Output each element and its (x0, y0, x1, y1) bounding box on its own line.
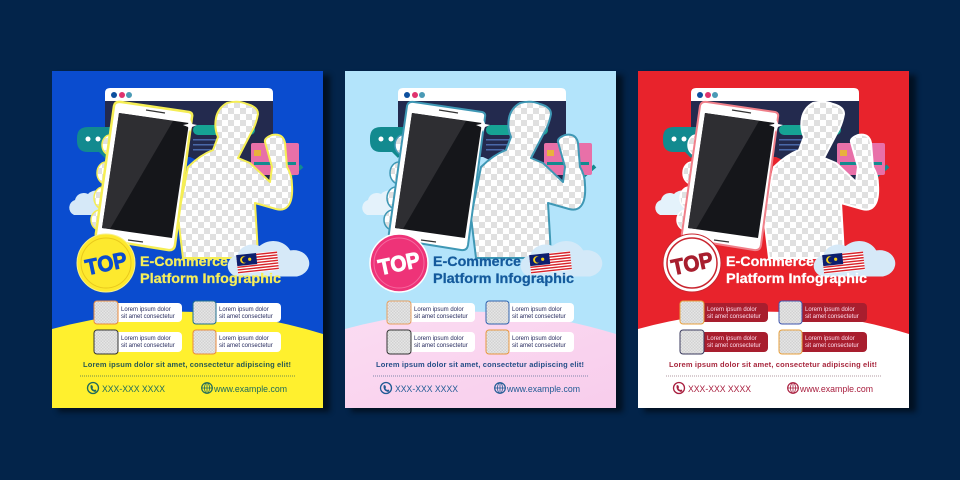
feature cards: Lorem ipsum dolor (805, 336, 855, 342)
bottom wave (345, 312, 616, 408)
contact phone: XXX-XXX XXXX (395, 384, 459, 395)
hand placeholder (384, 135, 411, 230)
feature cards: sit amet consectetur (219, 343, 273, 349)
cloud right (814, 241, 895, 276)
feature cards: sit amet consectetur (707, 314, 761, 320)
person placeholder (178, 102, 292, 258)
hand placeholder (677, 135, 704, 230)
icon: credit card (251, 143, 302, 178)
title (140, 253, 281, 286)
title: Platform Infographic (140, 270, 281, 286)
feature cards: sit amet consectetur (121, 314, 175, 320)
cloud left (69, 191, 117, 215)
title (726, 253, 867, 286)
tagline: Lorem ipsum dolor sit amet, consectetur adipiscing elit! (376, 360, 584, 369)
feature cards: sit amet consectetur (805, 314, 859, 320)
cloud left (655, 191, 703, 215)
phone (682, 102, 783, 250)
feature cards: Lorem ipsum dolor (121, 307, 171, 313)
bottom wave (52, 312, 323, 408)
feature cards: sit amet consectetur (512, 343, 566, 349)
browser window (691, 88, 859, 180)
feature cards: Lorem ipsum dolor (414, 336, 464, 342)
feature cards (680, 301, 867, 354)
feature cards: sit amet consectetur (805, 343, 859, 349)
contact phone: XXX-XXX XXXX (688, 384, 752, 395)
flag (236, 251, 279, 274)
browser window (398, 88, 566, 180)
hand placeholder (91, 135, 118, 230)
top badge (77, 234, 135, 292)
feature cards: Lorem ipsum dolor (121, 336, 171, 342)
feature cards: sit amet consectetur (121, 343, 175, 349)
cloud right (521, 241, 602, 276)
icon: chat bubble (663, 127, 699, 158)
contact phone (380, 382, 459, 395)
flag (529, 251, 572, 274)
feature cards: sit amet consectetur (512, 314, 566, 320)
title (433, 253, 574, 286)
contact web: www.example.com (213, 384, 287, 395)
feature cards: Lorem ipsum dolor (414, 307, 464, 313)
title: Platform Infographic (433, 270, 574, 286)
contact web: www.example.com (799, 384, 873, 395)
top badge (370, 234, 428, 292)
person placeholder (764, 102, 878, 258)
person placeholder (471, 102, 585, 258)
feature cards: Lorem ipsum dolor (512, 336, 562, 342)
poster: red and white (638, 71, 916, 412)
icon: chat bubble (77, 127, 113, 158)
feature cards: Lorem ipsum dolor (805, 307, 855, 313)
feature cards: Lorem ipsum dolor (512, 307, 562, 313)
feature cards (387, 301, 574, 354)
icon: credit card (837, 143, 888, 178)
title: Platform Infographic (726, 270, 867, 286)
flag (822, 251, 865, 274)
contact phone: XXX-XXX XXXX (102, 384, 166, 395)
feature cards: sit amet consectetur (414, 343, 468, 349)
feature cards (94, 301, 281, 354)
cloud right (228, 241, 309, 276)
title: E-Commerce (726, 253, 814, 269)
top badge: TOP (83, 247, 129, 280)
contact web: www.example.com (506, 384, 580, 395)
feature cards: sit amet consectetur (414, 314, 468, 320)
phone (96, 102, 197, 250)
poster: blue and yellow (52, 71, 330, 412)
feature cards: Lorem ipsum dolor (219, 336, 269, 342)
tagline: Lorem ipsum dolor sit amet, consectetur adipiscing elit! (83, 360, 291, 369)
top badge: TOP (376, 247, 422, 280)
top badge (663, 234, 721, 292)
feature cards: sit amet consectetur (707, 343, 761, 349)
poster: light blue and pink (345, 71, 623, 412)
phone (389, 102, 490, 250)
feature cards: Lorem ipsum dolor (707, 307, 757, 313)
bottom wave (638, 312, 909, 408)
tagline: Lorem ipsum dolor sit amet, consectetur adipiscing elit! (669, 360, 877, 369)
title: E-Commerce (140, 253, 228, 269)
contact phone (88, 382, 166, 395)
title: E-Commerce (433, 253, 521, 269)
contact phone (674, 382, 752, 395)
icon: credit card (544, 143, 595, 178)
cloud left (362, 191, 410, 215)
top badge: TOP (669, 247, 715, 280)
feature cards: Lorem ipsum dolor (707, 336, 757, 342)
feature cards: Lorem ipsum dolor (219, 307, 269, 313)
feature cards: sit amet consectetur (219, 314, 273, 320)
browser window (105, 88, 273, 180)
icon: chat bubble (370, 127, 406, 158)
